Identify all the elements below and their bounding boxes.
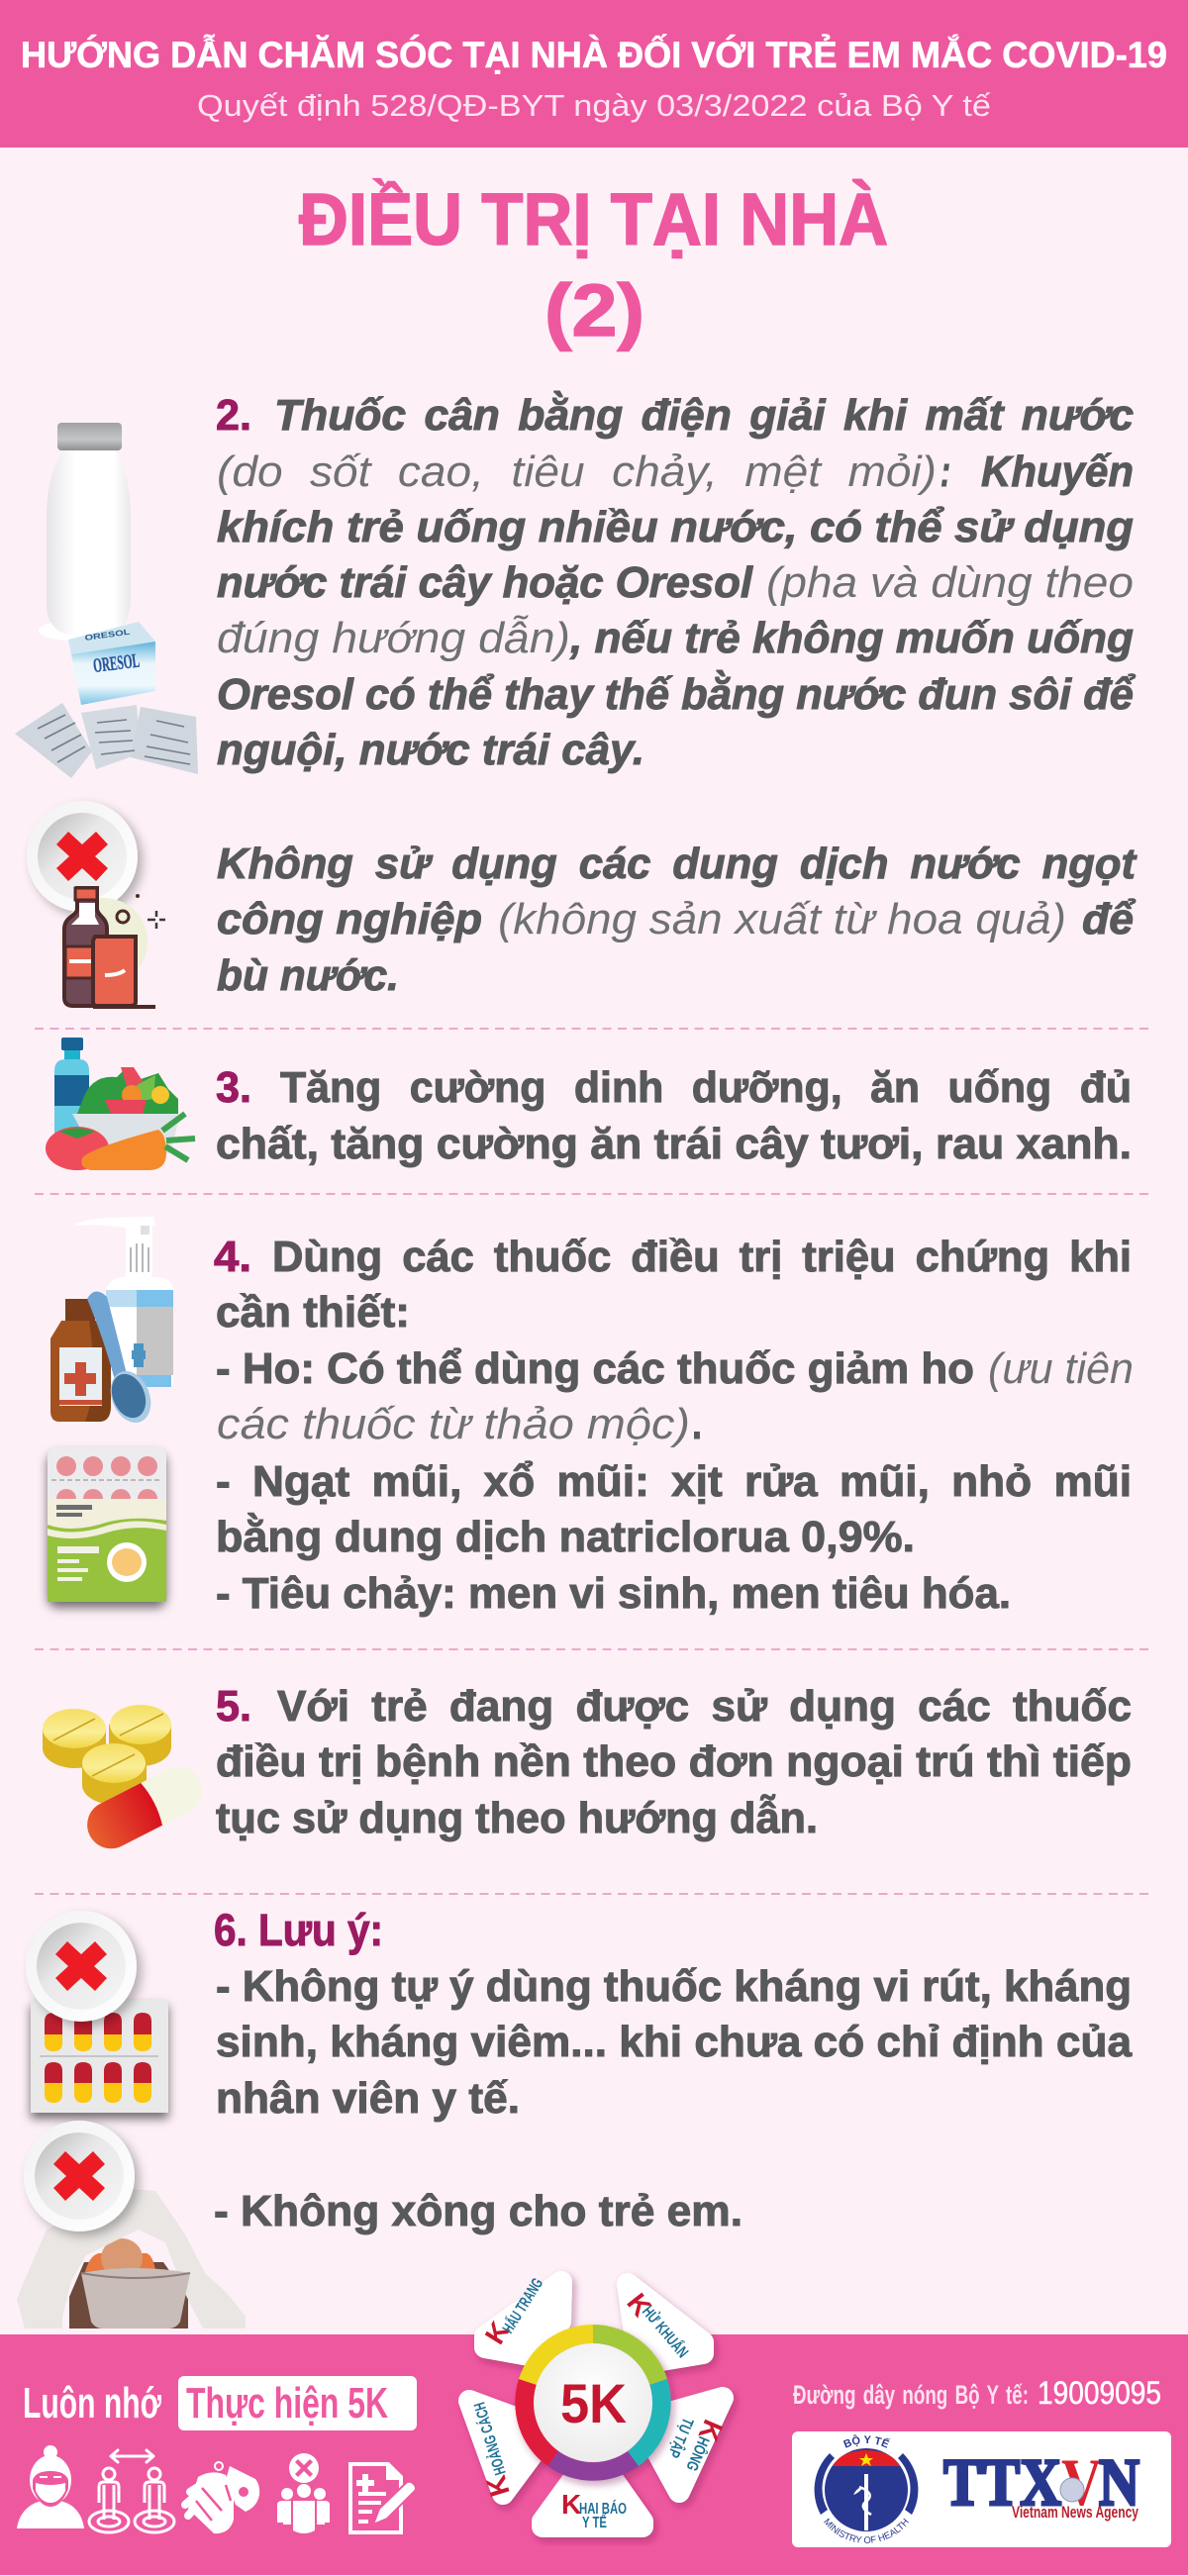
section 4 text: 4. bbox=[214, 1233, 251, 1281]
section 4 text: Dùng các thuốc điều trị triệu chứng khi bbox=[272, 1233, 1132, 1281]
section 2: electrolyte text: (pha và dùng theo bbox=[766, 558, 1134, 607]
section 4 text: (ưu tiên bbox=[988, 1344, 1134, 1393]
section 4 text: các thuốc từ thảo mộc) bbox=[217, 1400, 690, 1448]
section 2: electrolyte text: Khuyến bbox=[981, 447, 1134, 496]
logo: TTXVN: TTX bbox=[943, 2444, 1061, 2520]
logo panel bbox=[792, 2431, 1171, 2547]
footer band bbox=[0, 2334, 1188, 2575]
section 5 text: điều trị bệnh nền theo đơn ngoại trú thì tiếp bbox=[216, 1737, 1132, 1786]
main heading bbox=[299, 178, 888, 351]
petal: Khoảng cách: K bbox=[480, 2472, 516, 2500]
section 2: electrolyte text: , nếu trẻ không muốn uống bbox=[569, 614, 1134, 662]
hotline: Đường dây nóng Bộ Y tế: bbox=[793, 2380, 1029, 2410]
logo: Bộ Y tế: BỘ Y TẾ bbox=[843, 2434, 891, 2448]
icon row: 5K pictograms bbox=[17, 2445, 416, 2533]
petal: Không tụ tập: K bbox=[693, 2416, 729, 2445]
section 2: electrolyte text: đúng hướng dẫn) bbox=[217, 614, 570, 662]
slogan: always remember 5K: Thực hiện 5K bbox=[186, 2379, 388, 2427]
petal: Khoảng cách: HOẢNG CÁCH bbox=[469, 2400, 510, 2477]
icon: mask bbox=[17, 2445, 84, 2528]
hotline: 19009095 bbox=[1038, 2375, 1161, 2411]
section 2: bottle and Oresol pack image: ORESOL bbox=[92, 649, 141, 677]
section 5 text bbox=[216, 1682, 1132, 1842]
petal: Khai báo y tế: HAI BÁO bbox=[579, 2499, 627, 2518]
logo: TTXVN: V bbox=[1061, 2444, 1102, 2520]
section 2: bottle and Oresol pack image: ORESOL bbox=[84, 628, 131, 643]
logo: TTXVN: Vietnam News Agency bbox=[1012, 2503, 1138, 2522]
section 4 text: - Ngạt mũi, xổ mũi: xịt rửa mũi, nhỏ mũi bbox=[216, 1457, 1132, 1506]
section 6 text: 6. Lưu ý: bbox=[214, 1905, 383, 1955]
section 4 text: bằng dung dịch natriclorua 0,9%. bbox=[216, 1512, 915, 1561]
icon: healthy food bbox=[46, 1038, 195, 1170]
icon: medical form bbox=[350, 2464, 416, 2532]
section 2: electrolyte text: khích trẻ uống nhiều nước, có thể sử dụng bbox=[217, 503, 1134, 551]
section 2: electrolyte text bbox=[216, 389, 1136, 774]
icon: medicine box bbox=[48, 1447, 166, 1602]
section 2: no soft drink warning text bbox=[217, 840, 1138, 1000]
section 2: no soft drink warning text: công nghiệp bbox=[217, 895, 482, 943]
divider bbox=[35, 1648, 1153, 1650]
header band bbox=[0, 0, 1188, 148]
section 3 text bbox=[216, 1063, 1132, 1168]
section 2: no soft drink warning text: để bbox=[1082, 895, 1137, 943]
section 3 text: 3. bbox=[216, 1063, 251, 1112]
section 4 text: cần thiết: bbox=[216, 1288, 410, 1337]
section 4 text: . bbox=[692, 1400, 702, 1448]
section 4 text bbox=[214, 1233, 1134, 1618]
petal: Không tụ tập bbox=[656, 2398, 729, 2492]
petal: Không tụ tập: TỤ TẬP bbox=[664, 2415, 698, 2461]
petal: Khẩu trang: K bbox=[479, 2317, 516, 2349]
section 4 text: - Ho: Có thể dùng các thuốc giảm ho bbox=[216, 1344, 974, 1393]
petal: Khử khuẩn: K bbox=[621, 2288, 657, 2323]
petal: Khai báo y tế bbox=[543, 2478, 643, 2531]
logo: Bộ Y tế: MINISTRY OF HEALTH bbox=[824, 2519, 909, 2543]
section 6 text: - Không xông cho trẻ em. bbox=[214, 2187, 742, 2235]
icon: group with no-gathering cross bbox=[277, 2453, 330, 2533]
divider bbox=[35, 1028, 1153, 1030]
section 2: electrolyte text: : bbox=[940, 447, 950, 496]
icon: no self-medication, blister pack bbox=[26, 1911, 168, 2113]
section 2: bottle and Oresol pack image bbox=[15, 423, 198, 778]
petal: Không tụ tập: HÔNG bbox=[682, 2433, 714, 2474]
slogan: always remember 5K: Luôn nhớ bbox=[23, 2379, 161, 2427]
section 2: electrolyte text: (do sốt cao, tiêu chảy, mệt mỏi) bbox=[217, 447, 937, 496]
logo: TTXVN bbox=[943, 2444, 1139, 2522]
section 2: electrolyte text: 2. bbox=[216, 391, 251, 440]
icon: distance bbox=[89, 2450, 174, 2532]
section 6 text bbox=[214, 1905, 1133, 2235]
logo: TTXVN: N bbox=[1099, 2444, 1139, 2520]
section 2: no soft drink warning text: Không sử dụng các dung dịch nước ngọt bbox=[217, 840, 1138, 888]
slogan: always remember 5K bbox=[23, 2376, 417, 2430]
section 2: electrolyte text: nguội, nước trái cây. bbox=[217, 726, 644, 774]
section 3 text: chất, tăng cường ăn trái cây tươi, rau xanh. bbox=[216, 1120, 1132, 1168]
petal: Khai báo y tế: Y TẾ bbox=[582, 2513, 607, 2531]
petal: Khai báo y tế: K bbox=[561, 2489, 581, 2520]
color ring bbox=[515, 2325, 671, 2481]
icon: syrup, spoon and spray bottle bbox=[50, 1217, 173, 1429]
section 5 text: Với trẻ đang được sử dụng các thuốc bbox=[277, 1682, 1132, 1731]
section 5 text: 5. bbox=[216, 1682, 251, 1731]
section 2: no soft drink warning text: bù nước. bbox=[217, 951, 399, 1000]
petal: Khử khuẩn bbox=[621, 2284, 703, 2361]
section 3 text: Tăng cường dinh dưỡng, ăn uống đủ bbox=[280, 1063, 1132, 1112]
section 4 text: - Tiêu chảy: men vi sinh, men tiêu hóa. bbox=[216, 1569, 1011, 1618]
petal: Khẩu trang bbox=[479, 2274, 561, 2356]
section 5 text: tục sử dụng theo hướng dẫn. bbox=[216, 1793, 818, 1842]
petal: Khoảng cách bbox=[469, 2400, 532, 2500]
section 2: electrolyte text: nước trái cây hoặc Oresol bbox=[217, 558, 753, 607]
icon: yellow pills and capsule bbox=[43, 1705, 210, 1857]
icon: child steam inhalation photo, crossed out bbox=[17, 2121, 246, 2328]
5K diagram bbox=[469, 2274, 729, 2531]
section 2: no soft drink warning text: (không sản xuất từ hoa quả) bbox=[498, 895, 1066, 943]
section 6 text: nhân viên y tế. bbox=[216, 2074, 520, 2123]
section 2: electrolyte text: Oresol có thể thay thế bằng nước đun sôi để bbox=[217, 668, 1136, 719]
icon: no soft drinks bbox=[27, 801, 165, 1007]
logo: Bộ Y tế bbox=[814, 2434, 919, 2543]
section 6 text: - Không tự ý dùng thuốc kháng vi rút, kháng bbox=[216, 1962, 1132, 2011]
5K label: 5K bbox=[560, 2372, 627, 2434]
main heading: (2) bbox=[544, 269, 644, 351]
divider bbox=[35, 1893, 1153, 1895]
header subtitle: Quyết định 528/QĐ-BYT ngày 03/3/2022 của Bộ Y tế bbox=[197, 88, 991, 123]
header title: HƯỚNG DẪN CHĂM SÓC TẠI NHÀ ĐỐI VỚI TRẺ EM MẮC COVID-19 bbox=[21, 34, 1167, 75]
main heading: ĐIỀU TRỊ TẠI NHÀ bbox=[299, 178, 888, 260]
divider bbox=[35, 1193, 1153, 1195]
petal: Khẩu trang: HẨU TRANG bbox=[498, 2274, 546, 2336]
petal: Khử khuẩn: HỬ KHUẨN bbox=[639, 2302, 692, 2361]
section 6 text: sinh, kháng viêm... khi chưa có chỉ định của bbox=[216, 2018, 1133, 2066]
icon: hand washing bbox=[185, 2462, 259, 2533]
section 2: electrolyte text: Thuốc cân bằng điện giải khi mất nước bbox=[274, 389, 1134, 440]
